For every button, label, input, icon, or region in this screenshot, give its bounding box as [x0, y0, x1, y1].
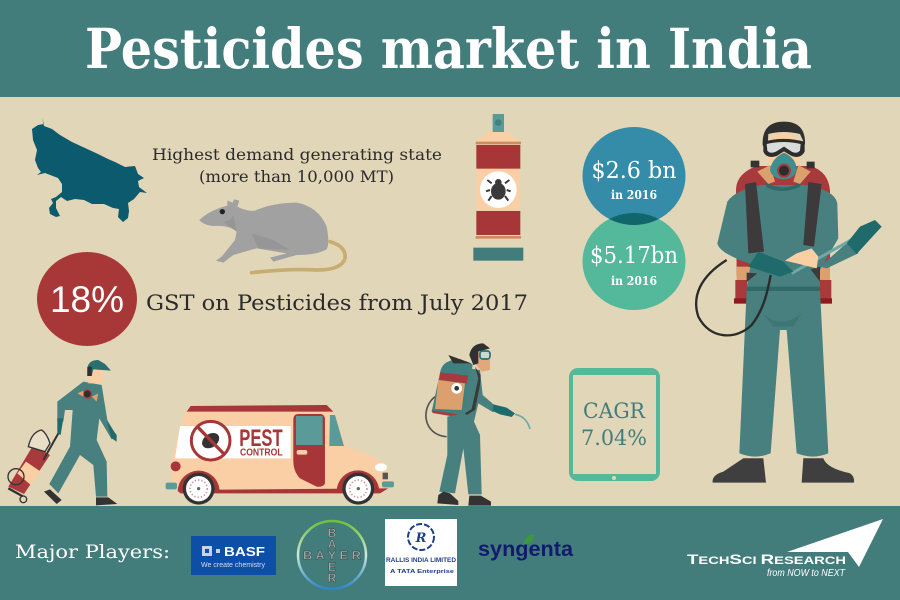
- CAGR value: [581, 399, 647, 450]
- stat: 2016 market: $2.6 bn: [592, 158, 677, 184]
- illustration: pest control van: [166, 405, 394, 505]
- illustration: large sprayer worker: [696, 122, 882, 483]
- logo: Bayer: E: [328, 560, 336, 574]
- illustration: worker spraying: [426, 343, 530, 506]
- logo: Rallis: R: [415, 531, 427, 546]
- GST badge: [37, 252, 137, 346]
- icon: rat: [199, 199, 345, 273]
- stat: forecast market: in 2016: [611, 274, 657, 288]
- stat circles: [582, 127, 686, 310]
- map: Uttar Pradesh: [32, 118, 147, 222]
- logo: Bayer: R: [328, 571, 337, 585]
- GST text: GST on Pesticides from July 2017: [146, 291, 528, 315]
- logo: Bayer: [298, 521, 366, 589]
- logo: Rallis: A TATA Enterprise: [390, 569, 454, 575]
- GST badge: 18%: [50, 279, 124, 320]
- illustration: pest control van: PEST: [239, 425, 283, 452]
- logo: BASF: BASF: [224, 544, 265, 559]
- logo: TechSci Research: T ECH S CI R ESEARCH: [687, 551, 846, 567]
- CAGR value: CAGR: [583, 399, 646, 423]
- footer band: [0, 506, 900, 600]
- title: Pesticides market in India: [85, 16, 812, 81]
- stat: 2016 market: in 2016: [611, 188, 657, 202]
- logo: TechSci Research: from NOW to NEXT: [767, 568, 846, 579]
- logo: Bayer: B A Y E R: [303, 548, 361, 562]
- stat: forecast market: $5.17bn: [590, 243, 678, 269]
- logo: Syngenta: syngenta: [478, 538, 573, 561]
- logo: BASF: [191, 536, 276, 575]
- title banner: [0, 0, 900, 97]
- logo: Bayer: A: [328, 537, 337, 551]
- logo: TechSci Research: [687, 519, 883, 579]
- illustration: walking worker with trolley: [8, 360, 117, 505]
- state demand text: Highest demand generating state: [152, 145, 442, 164]
- logo: Rallis: [385, 519, 457, 586]
- CAGR value: 7.04%: [581, 426, 647, 450]
- stat: 2016 market: [592, 158, 677, 202]
- major players label: Major Players:: [15, 541, 170, 563]
- state demand text: (more than 10,000 MT): [199, 167, 394, 186]
- state demand text: [152, 145, 442, 186]
- icon: spray can: [473, 114, 523, 261]
- logo: Bayer: B: [328, 526, 337, 540]
- logo: BASF: We create chemistry: [201, 562, 265, 569]
- illustration: pest control van: CONTROL: [240, 447, 283, 458]
- stat: forecast market: [590, 243, 678, 288]
- hose: [696, 260, 771, 335]
- CAGR tablet: [569, 368, 660, 481]
- logo: Rallis: RALLIS INDIA LIMITED: [386, 558, 457, 564]
